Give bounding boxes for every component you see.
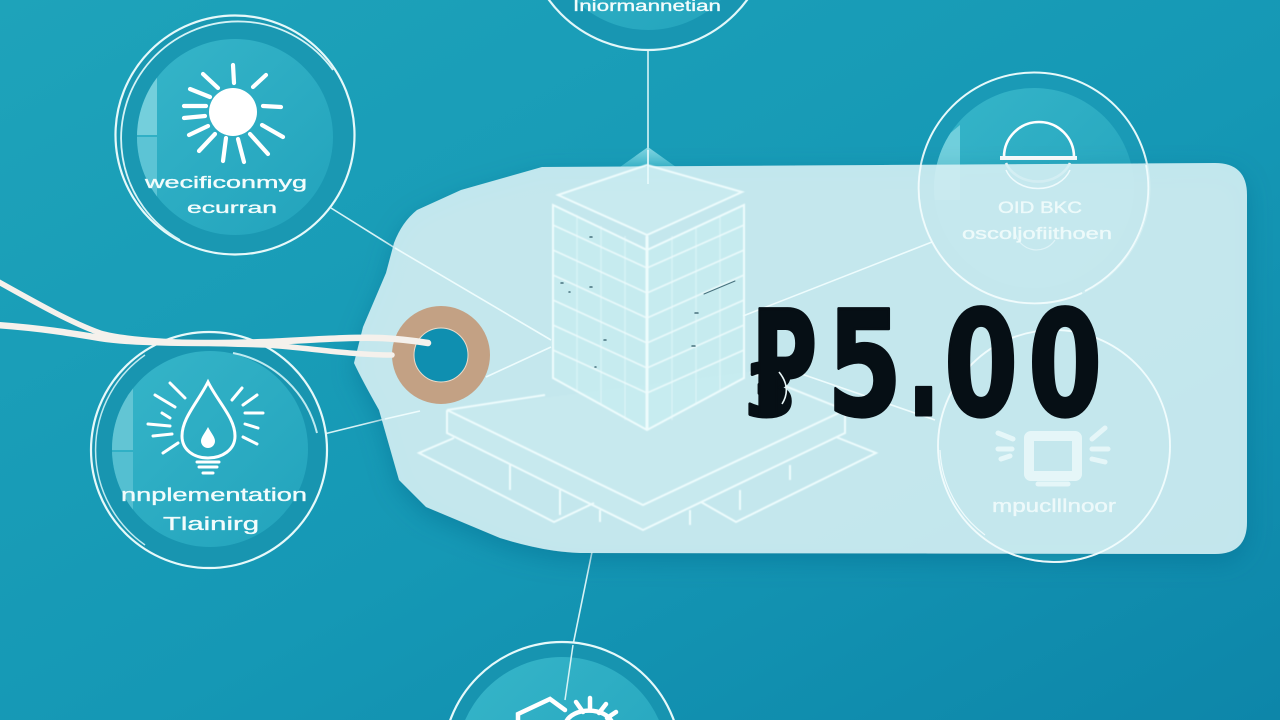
device ring on tag: [938, 330, 1170, 562]
tower: [553, 165, 744, 430]
label: helmet: oscoljofiithoen: [962, 224, 1112, 243]
window marks: [561, 237, 735, 367]
grommet: [403, 317, 479, 393]
connector lines: [320, 50, 648, 645]
disc highlight: [936, 125, 960, 165]
price text: P: [751, 279, 817, 450]
circle: sun: ecurran: [187, 200, 277, 217]
icon: sun: [184, 65, 283, 162]
price text: [745, 279, 1102, 450]
string: [0, 281, 428, 355]
disc highlight: [137, 78, 157, 196]
label: helmet: OID BKC: [998, 198, 1082, 217]
circle: helmet (behind tag): [918, 72, 1150, 304]
icon: helmet dome: [1000, 122, 1077, 182]
label: sun: wecificonmyg: [143, 173, 307, 192]
arrow: tag apex: [620, 147, 676, 167]
circle: device (behind tag): [938, 330, 1170, 562]
price text: 3: [745, 350, 796, 434]
helmet ring on tag: [919, 165, 1148, 303]
icon: drop bulb: [148, 382, 263, 473]
price text: 0: [1028, 280, 1102, 450]
circle: bottom: [443, 642, 681, 720]
icon: device: [998, 428, 1108, 484]
price text: .: [907, 280, 940, 450]
price tag: [354, 150, 1247, 562]
label: implementation: nnplementation: [121, 485, 307, 505]
connector into bottom disc: [565, 645, 573, 700]
connector lines on tag: [385, 150, 935, 420]
label: device: mpuclllnoor: [992, 496, 1116, 516]
price text: 0: [944, 280, 1018, 450]
price text: 5: [827, 281, 902, 450]
circle: implementation training: Tlainirg: [163, 514, 259, 534]
label: helmet: [962, 198, 1112, 243]
disc highlight: [112, 388, 133, 510]
building base: [419, 372, 876, 530]
circle: implementation training: [91, 332, 327, 568]
building illustration: [419, 165, 876, 530]
icon: building and sun: [518, 698, 616, 720]
circle: top information: [525, 0, 771, 50]
circle: sun: [116, 16, 354, 254]
